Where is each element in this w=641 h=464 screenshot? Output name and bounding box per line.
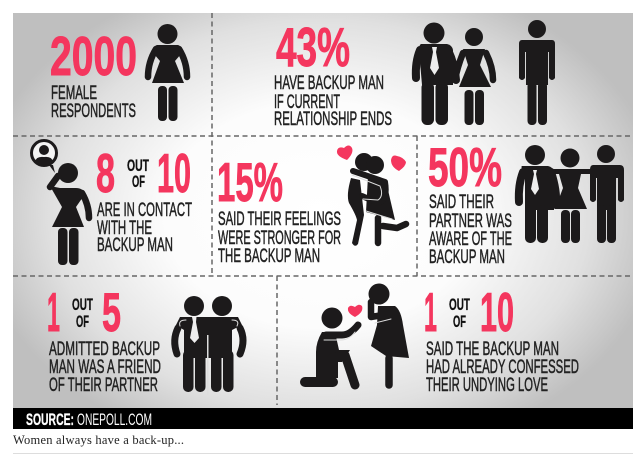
- panel: 50 percent partner aware: [428, 136, 624, 268]
- label: feelings stronger: SAID THEIR FEELINGS: [218, 208, 341, 230]
- label: partner aware: PARTNER WAS: [429, 210, 512, 232]
- label: have backup man: RELATIONSHIP ENDS: [274, 108, 392, 130]
- label: are in contact: ARE IN CONTACT: [97, 199, 192, 221]
- stat: 1 out of 10: OUT: [449, 296, 470, 314]
- label: are in contact: [97, 199, 192, 256]
- label: have backup man: [274, 72, 392, 130]
- panel: 2000 female respondents: [50, 24, 187, 122]
- stat: 1 out of 10: 1: [424, 281, 437, 343]
- label: friend of partner: [49, 338, 161, 396]
- caption: Women always have a back-up...: [13, 433, 184, 447]
- stat: 1 out of 10: 10: [480, 281, 514, 343]
- stat: 8 out of 10: [96, 142, 191, 204]
- label: have backup man: HAVE BACKUP MAN: [274, 72, 384, 94]
- stat: 1 out of 5: OF: [76, 313, 89, 331]
- stat: 1 out of 5: 1: [47, 281, 60, 343]
- stat: 1 out of 10: OF: [453, 313, 466, 331]
- stat: 8 out of 10: OF: [132, 173, 145, 191]
- panel: 1 out of 5 friend of partner: [47, 281, 243, 396]
- source bar: SOURCE:: [26, 410, 74, 429]
- source bar: [13, 408, 633, 429]
- label: partner aware: BACKUP MAN: [429, 246, 505, 268]
- label: female respondents: RESPONDENTS: [51, 100, 136, 122]
- panel: 1 out of 10 confessed love: [305, 281, 579, 396]
- label: friend of partner: MAN WAS A FRIEND: [49, 356, 161, 378]
- label: feelings stronger: [218, 208, 341, 267]
- panel: 15 percent feelings stronger: [217, 146, 406, 267]
- stat: 8 out of 10: OUT: [127, 157, 149, 175]
- source bar: ONEPOLL.COM: [77, 410, 152, 429]
- label: partner aware: [429, 191, 512, 268]
- stat: 50%: 50%: [428, 136, 502, 198]
- label: partner aware: AWARE OF THE: [429, 228, 512, 250]
- stat: 2000: 2000: [50, 25, 137, 87]
- label: feelings stronger: WERE STRONGER FOR: [218, 227, 341, 249]
- icon: woman between two men: [519, 145, 624, 243]
- stat: 1 out of 5: 5: [102, 281, 121, 343]
- label: confessed undying love: THEIR UNDYING LOVE: [426, 374, 548, 396]
- icon: backup man: [519, 20, 555, 125]
- label: female respondents: FEMALE: [51, 82, 97, 104]
- icon: two male friends: [175, 296, 243, 395]
- label: are in contact: WITH THE: [97, 217, 152, 239]
- label: friend of partner: ADMITTED BACKUP: [49, 338, 160, 360]
- stat: 1 out of 5: OUT: [72, 296, 93, 314]
- label: friend of partner: OF THEIR PARTNER: [49, 374, 158, 396]
- icon: kneeling man offering heart to woman: [305, 284, 409, 385]
- stat: 1 out of 5: [47, 281, 121, 343]
- stat: 43%: 43%: [276, 16, 350, 78]
- label: feelings stronger: THE BACKUP MAN: [218, 245, 320, 267]
- stat: 8 out of 10: 10: [157, 142, 191, 204]
- icon: couple holding hands: [416, 22, 493, 125]
- icon: woman: [148, 24, 187, 121]
- label: confessed undying love: [426, 338, 579, 396]
- stat: 15%: 15%: [217, 151, 283, 213]
- stat: 1 out of 10: [424, 281, 514, 343]
- panel: 43 percent have a backup man: [274, 16, 555, 130]
- label: female respondents: [51, 82, 136, 122]
- panel: 8 out of 10 in contact: [32, 140, 192, 265]
- label: partner aware: SAID THEIR: [429, 191, 494, 213]
- label: have backup man: IF CURRENT: [274, 91, 340, 113]
- label: are in contact: BACKUP MAN: [97, 234, 173, 256]
- icon: woman on phone with thought bubble: [32, 140, 89, 265]
- stat: 8 out of 10: 8: [96, 142, 115, 204]
- icon: embracing couple with hearts: [337, 146, 406, 246]
